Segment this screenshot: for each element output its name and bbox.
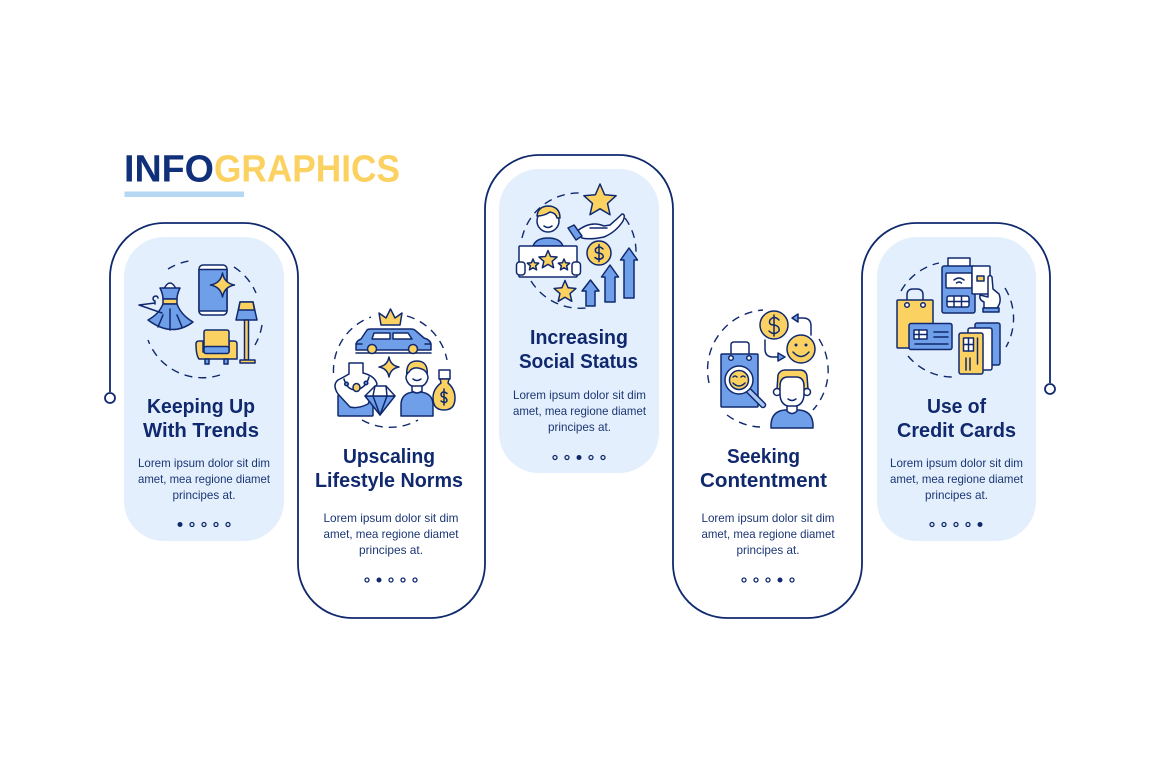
- heading: Increasing: [530, 326, 628, 349]
- heading: Use of: [927, 395, 986, 418]
- panel: Keeping Up With Trends: [124, 237, 284, 541]
- body text: principes at.: [172, 488, 236, 502]
- panel: Use of Credit Cards: [877, 237, 1036, 541]
- body text: amet, mea regione diamet: [513, 404, 647, 418]
- heading: [519, 326, 638, 373]
- body text: principes at.: [359, 543, 423, 557]
- body text: amet, mea regione diamet: [702, 527, 835, 541]
- body text: amet, mea regione diamet: [324, 527, 459, 541]
- heading: Credit Cards: [897, 419, 1016, 442]
- heading: [143, 395, 259, 442]
- heading: [897, 395, 1016, 442]
- title: [124, 148, 400, 197]
- icon: payment terminal, shopping bag and credit cards: [897, 258, 1014, 377]
- heading: With Trends: [143, 419, 259, 442]
- heading: Upscaling: [343, 445, 435, 468]
- heading: Seeking: [727, 445, 800, 468]
- panel: Upscaling Lifestyle Norms: [315, 309, 463, 582]
- pagination dots: [930, 522, 982, 527]
- body text: Lorem ipsum dolor sit dim: [890, 456, 1023, 470]
- pagination dots: [553, 455, 605, 460]
- heading: [700, 445, 827, 492]
- panel: Seeking Contentment: [700, 310, 835, 582]
- body text: [890, 456, 1024, 502]
- icon: dress, phone, armchair and lamp: [139, 261, 262, 378]
- title: GRAPHICS: [214, 148, 400, 190]
- body text: Lorem ipsum dolor sit dim: [324, 511, 458, 525]
- title: INFO: [124, 148, 214, 190]
- body text: [138, 456, 271, 502]
- heading: Lifestyle Norms: [315, 469, 463, 492]
- body text: [513, 388, 647, 434]
- body text: [324, 511, 459, 557]
- panel: Increasing Social Status: [499, 169, 659, 473]
- icon: car, crown, jewellery and wealthy man: [333, 309, 455, 427]
- body text: [702, 511, 835, 557]
- body text: Lorem ipsum dolor sit dim: [513, 388, 646, 402]
- body text: Lorem ipsum dolor sit dim: [702, 511, 834, 525]
- winding outline connecting the panels: [105, 155, 1055, 618]
- body text: amet, mea regione diamet: [138, 472, 271, 486]
- pagination dots: [178, 522, 230, 527]
- body text: principes at.: [736, 543, 800, 557]
- icon: shopping bag with magnifier, coin, smiley and man: [708, 310, 828, 428]
- pagination dots: [365, 578, 417, 582]
- body text: amet, mea regione diamet: [890, 472, 1024, 486]
- body text: principes at.: [548, 420, 611, 434]
- body text: Lorem ipsum dolor sit dim: [138, 456, 270, 470]
- heading: Keeping Up: [147, 395, 255, 418]
- body text: principes at.: [925, 488, 988, 502]
- heading: Social Status: [519, 350, 638, 373]
- heading: Contentment: [700, 469, 827, 492]
- pagination dots: [742, 578, 794, 582]
- heading: [315, 445, 463, 492]
- icon: rated person, hand with star, coin and rising arrows: [516, 184, 638, 308]
